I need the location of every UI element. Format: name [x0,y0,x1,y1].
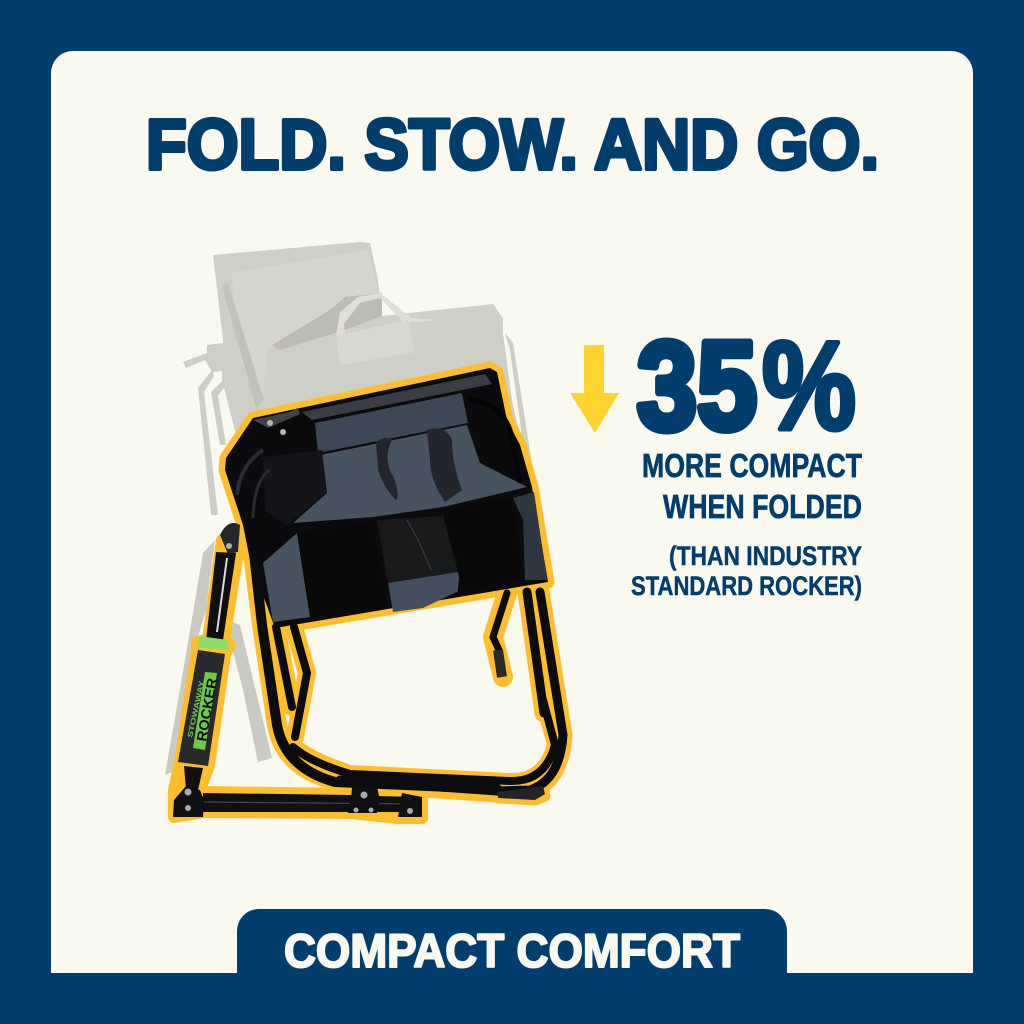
hinge bracket [253,408,306,445]
stat: 35%: 35 [637,317,757,456]
arrow down [570,345,619,433]
stat: 35%: % [762,317,856,456]
base foot rail [173,786,422,817]
footer tab [237,909,787,977]
stowaway label text: STOWAWAY [187,680,206,738]
rocker label text: ROCKER [193,677,220,743]
highlight outline of folded chair [174,368,563,818]
text: more compact: MORE COMPACT [642,447,862,484]
rocker arm with label [178,523,240,790]
rear foot pad [497,786,545,800]
folded chair frame tubes [248,500,563,791]
title: FOLD. STOW. AND GO. [146,106,879,185]
stat: 35% [637,317,856,456]
text: than industry: (THAN INDUSTRY [669,541,862,571]
ghost: unfolded chair silhouette [165,242,533,775]
text: standard rocker: STANDARD ROCKER) [631,571,862,601]
footer label: COMPACT COMFORT [284,924,740,977]
folded chair fabric [225,368,548,628]
text: when folded: WHEN FOLDED [663,488,862,525]
